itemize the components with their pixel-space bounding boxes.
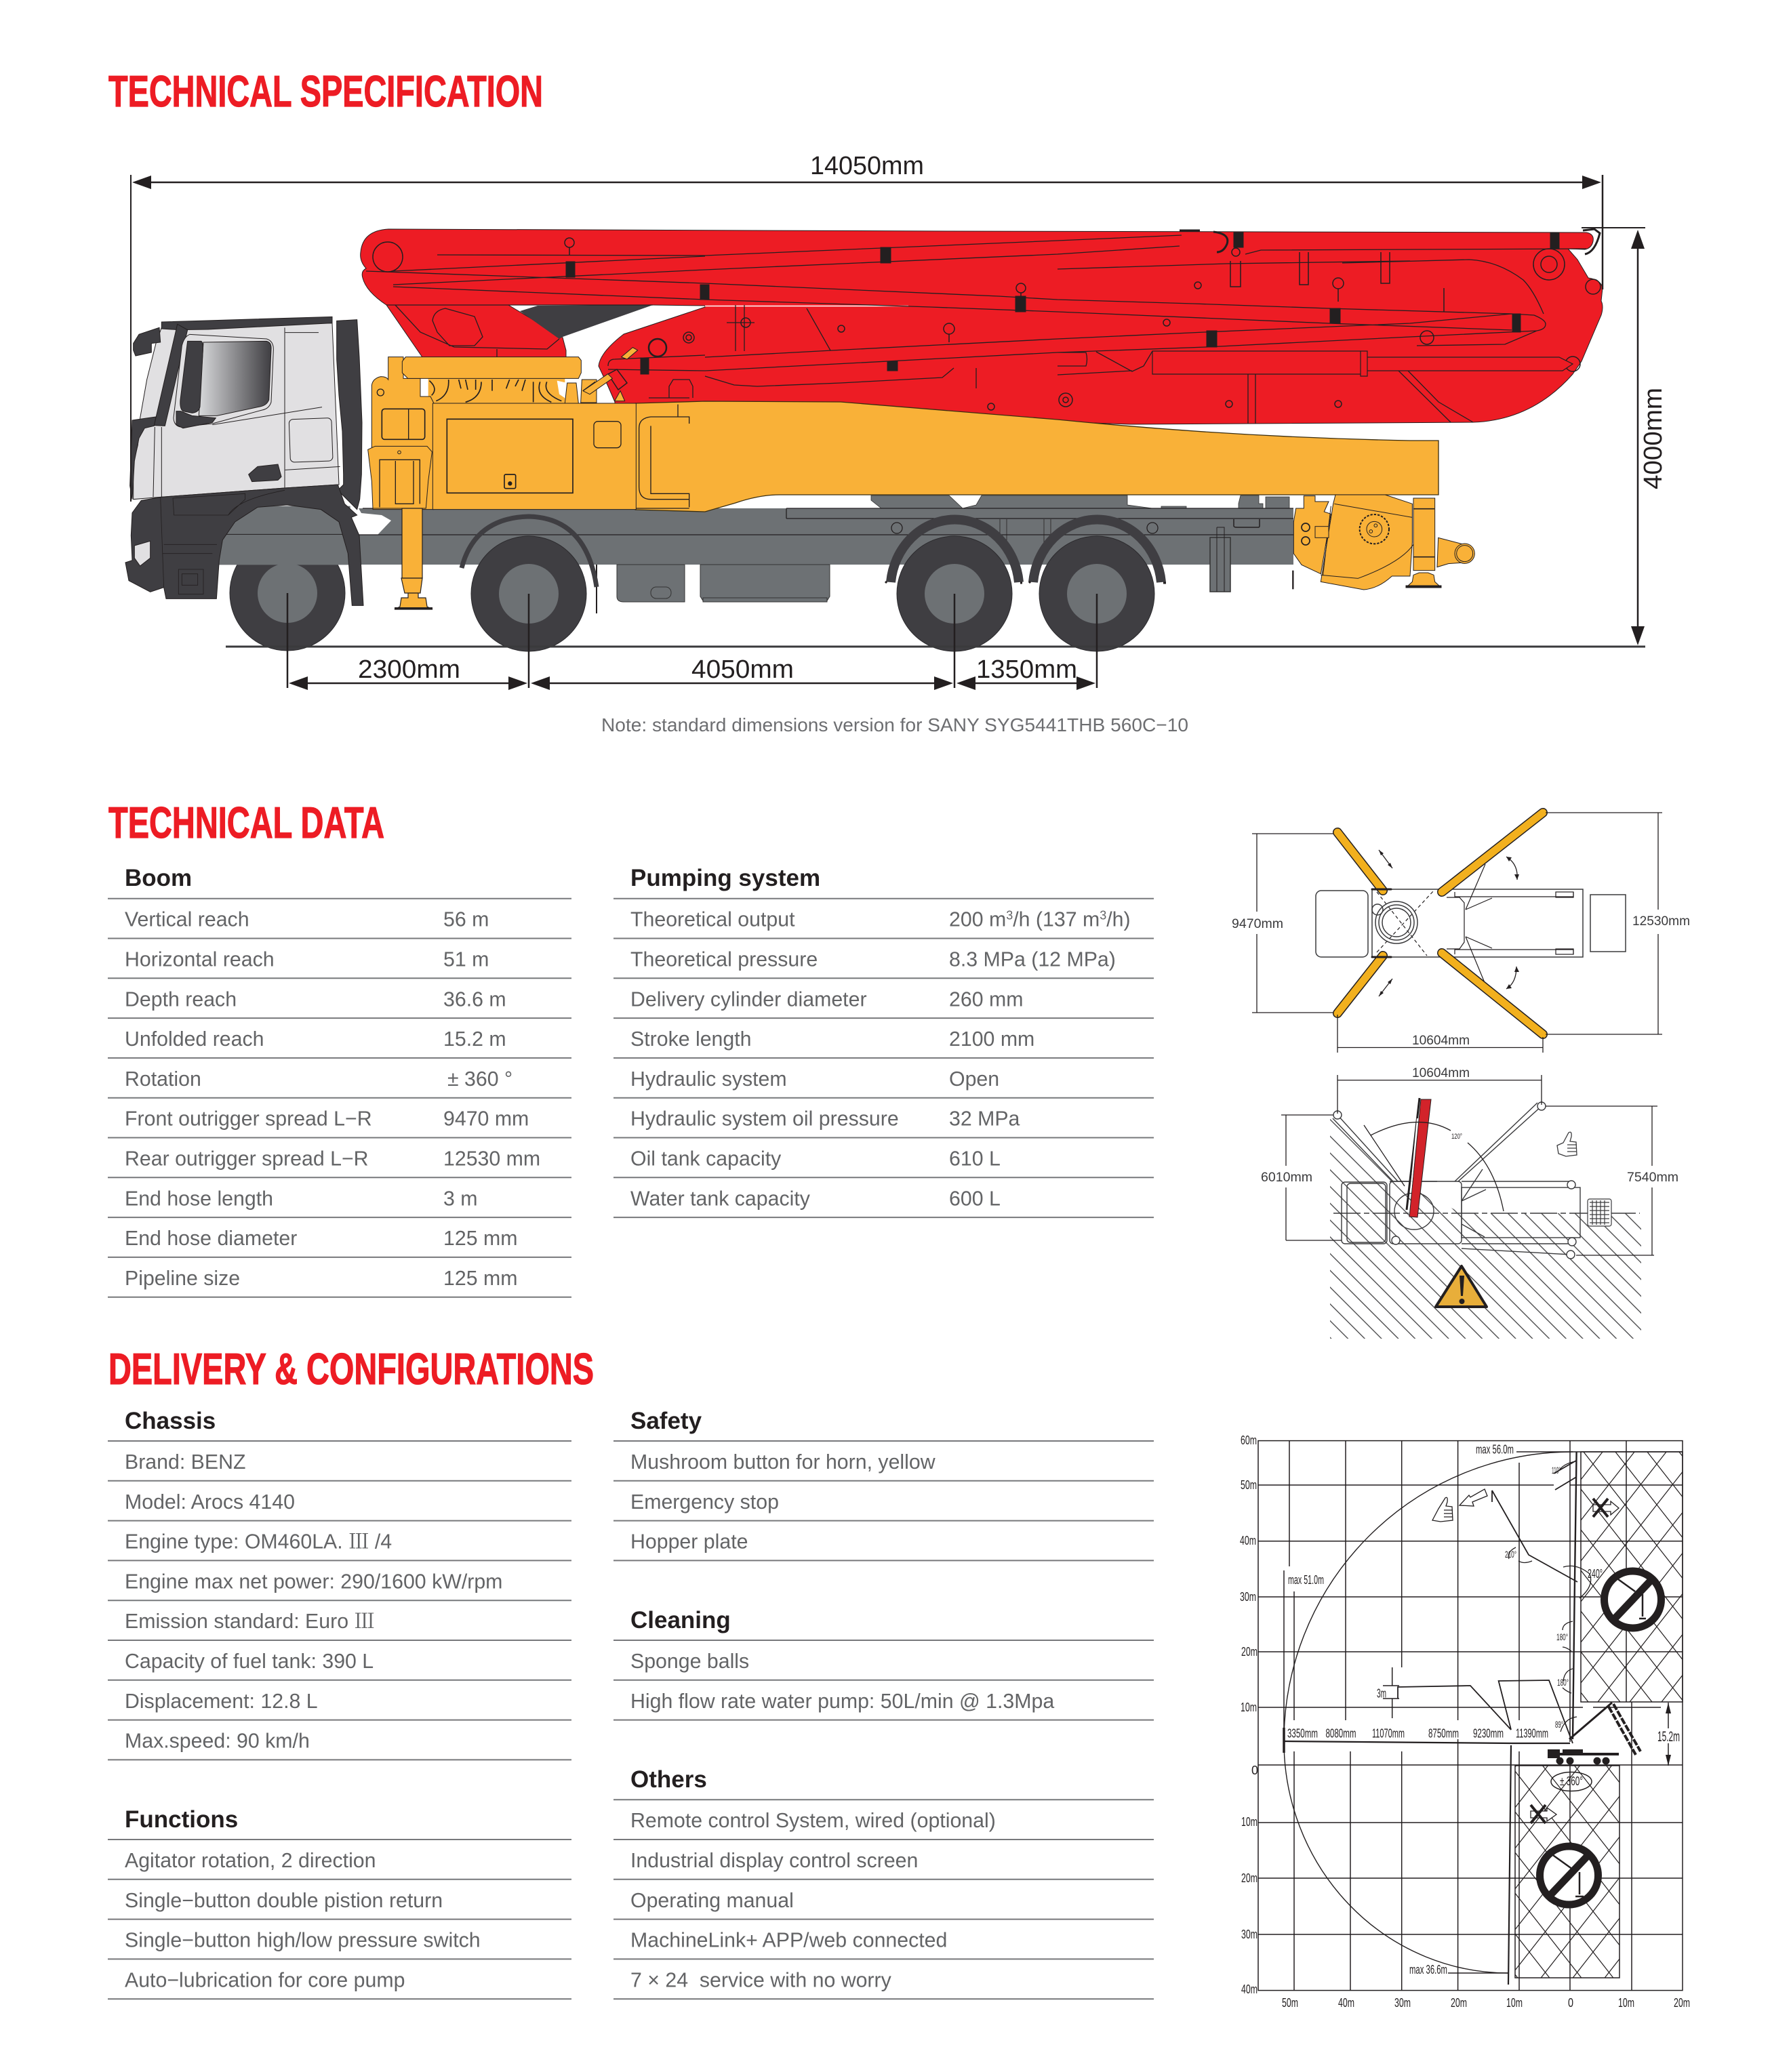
vertical axis labels: 50m	[1241, 1478, 1257, 1492]
plan: dimension 10604mm: 10604mm	[1412, 1034, 1470, 1048]
icon: thumb up	[1557, 1132, 1577, 1156]
agitator gear	[1360, 514, 1389, 544]
side window	[174, 334, 273, 427]
red concrete boom	[361, 229, 1603, 424]
crossed arrow upper	[1593, 1499, 1619, 1517]
table: pumping system	[613, 865, 1154, 1217]
list: chassis: Emission standard: Euro Ⅲ	[125, 1604, 375, 1634]
dimension: wheelbase values	[287, 593, 1097, 690]
rear pump and hopper	[1293, 495, 1474, 590]
dimension 10604mm: 10604mm	[1412, 1066, 1470, 1080]
thumb icon with direction arrow	[1432, 1489, 1487, 1522]
outrigger plan view diagram	[1232, 813, 1690, 1053]
chart grid	[1258, 1441, 1683, 1991]
list: others: Operating manual	[630, 1890, 794, 1912]
boom section lengths: 11390mm	[1516, 1727, 1548, 1741]
table: boom: 3 m	[443, 1187, 478, 1210]
plan: motion arrows	[1379, 850, 1519, 996]
table: pumping system: Theoretical pressure	[630, 949, 818, 971]
table: boom	[108, 865, 571, 1297]
list: chassis	[108, 1408, 571, 1760]
boom poses	[1284, 1452, 1641, 1985]
truck cab	[125, 317, 363, 605]
table: boom: ± 360 °	[447, 1068, 512, 1091]
plan: dimension 10604mm	[1337, 1015, 1543, 1053]
icon: hopper grid	[1588, 1199, 1611, 1226]
list: cleaning: Cleaning	[630, 1607, 731, 1633]
crossed arrow lower	[1531, 1805, 1556, 1823]
long yellow beam	[635, 401, 1438, 512]
vertical axis labels: 30m	[1241, 1928, 1257, 1941]
list: chassis: Max.speed: 90 km/h	[125, 1730, 310, 1753]
list: others: Industrial display control screen	[630, 1850, 918, 1872]
dimension: overall height 4000mm: 4000mm	[1639, 388, 1668, 489]
table: pumping system: 8.3 MPa (12 MPa)	[949, 949, 1116, 971]
angle arcs	[1508, 1461, 1591, 1732]
list: safety	[613, 1408, 1154, 1560]
vertical axis labels: 60m	[1241, 1434, 1257, 1447]
slew angle arc 120 degrees: 120°	[1451, 1133, 1462, 1141]
dimension: wheelbase values: 1350mm	[976, 655, 1077, 684]
table: boom: 36.6 m	[443, 988, 506, 1011]
no-entry sign lower	[1540, 1846, 1598, 1905]
truck side elevation drawing	[125, 229, 1645, 651]
vertical axis labels: 40m	[1240, 1534, 1256, 1547]
rod and cylinder	[1152, 351, 1573, 376]
table: boom: Front outrigger spread L−R	[125, 1108, 372, 1131]
second wheel	[471, 536, 586, 651]
horizontal axis labels	[1282, 1996, 1690, 2010]
joint angle labels: 180°	[1557, 1677, 1569, 1688]
vertical axis labels: 20m	[1241, 1645, 1257, 1659]
table: boom: 15.2 m	[443, 1028, 506, 1051]
chassis	[217, 495, 1293, 565]
wheel well gray	[217, 506, 350, 565]
dark rear strut	[520, 305, 653, 339]
table: pumping system: Oil tank capacity	[630, 1148, 782, 1170]
list: others: 7 × 24 service with no worry	[630, 1969, 892, 1991]
cab shell	[134, 323, 339, 500]
joint angle labels: 240°	[1588, 1567, 1603, 1581]
dimension 10604mm	[1337, 1066, 1542, 1114]
outlet pipe	[1437, 537, 1464, 567]
no-entry sign upper	[1604, 1571, 1661, 1628]
table: pumping system: 610 L	[949, 1148, 1001, 1170]
table: pumping system: Delivery cylinder diameter	[630, 988, 867, 1011]
table: boom: Vertical reach	[125, 909, 249, 931]
vertical axis labels: 30m	[1240, 1590, 1256, 1604]
door handle	[249, 464, 281, 482]
horizontal axis labels: 20m	[1674, 1996, 1690, 2010]
horizontal axis labels: 20m	[1451, 1996, 1467, 2010]
table: boom: End hose length	[125, 1187, 273, 1210]
hinge circles	[373, 238, 1601, 410]
table: pumping system: 200 m	[949, 909, 1006, 931]
table: boom: Unfolded reach	[125, 1028, 264, 1051]
dimension: wheelbase values: 2300mm	[358, 655, 460, 684]
joint angle labels: 110°	[1552, 1465, 1561, 1476]
vertical axis labels: 0	[1251, 1764, 1258, 1777]
table: pumping system: Theoretical output	[630, 909, 795, 931]
table: boom: Rear outrigger spread L−R	[125, 1148, 369, 1170]
reach envelope arc	[1284, 1452, 1573, 1973]
table: boom: Boom	[125, 865, 192, 891]
list: chassis: Chassis	[125, 1408, 216, 1434]
boom section lengths: 9230mm	[1473, 1727, 1504, 1741]
white gap between boom sections	[705, 305, 908, 306]
horizontal axis labels: 10m	[1506, 1996, 1523, 2010]
boom section lengths: 11070mm	[1372, 1727, 1405, 1741]
table: boom: 125 mm	[443, 1267, 517, 1290]
end bend and clamps	[1180, 229, 1600, 254]
top tube end and collars	[566, 232, 1559, 374]
door lines and panel	[153, 327, 340, 505]
table: pumping system: 260 mm	[949, 988, 1023, 1011]
table: pumping system: 2100 mm	[949, 1028, 1034, 1051]
rear wheel 1	[897, 536, 1012, 651]
end hose 3m dimension: 3m	[1377, 1686, 1386, 1700]
roof	[161, 317, 332, 330]
plan: dimension 12530mm	[1546, 813, 1690, 1034]
reach labels: max 56.0m	[1476, 1442, 1514, 1456]
list: chassis: Brand: BENZ	[125, 1451, 245, 1474]
horizontal axis labels: 50m	[1282, 1996, 1298, 2010]
front outrigger leg	[395, 508, 432, 609]
horizontal axis labels: 40m	[1338, 1996, 1354, 2010]
table: pumping system: 3	[1006, 909, 1013, 922]
list: functions: Single−button double pistion return	[125, 1890, 443, 1912]
rotation ellipse with label: ± 360°	[1560, 1774, 1583, 1788]
list: functions: Agitator rotation, 2 direction	[125, 1850, 376, 1872]
horizontal axis labels: 30m	[1394, 1996, 1411, 2010]
list: others: Remote control System, wired (optional)	[630, 1810, 996, 1832]
list: chassis: Model: Arocs 4140	[125, 1491, 295, 1514]
table: pumping system: Hydraulic system	[630, 1068, 787, 1091]
vertical axis labels: 10m	[1241, 1815, 1257, 1829]
list: functions: Functions	[125, 1806, 238, 1833]
rear pipe column	[337, 320, 362, 510]
list: safety: Hopper plate	[630, 1531, 748, 1553]
list: safety: Safety	[630, 1408, 702, 1434]
table: pumping system: Hydraulic system oil pressure	[630, 1108, 899, 1131]
plan: cab, body and rear outlines	[1316, 889, 1626, 957]
plan: internal frame lines	[1377, 864, 1573, 984]
table: boom: 125 mm	[443, 1227, 517, 1250]
A-pillar	[154, 324, 188, 426]
stability working zone diagram	[1261, 1066, 1678, 1339]
red boom	[1407, 1098, 1431, 1217]
horizontal axis labels: 10m	[1618, 1996, 1634, 2010]
list: chassis: Displacement: 12.8 L	[125, 1690, 318, 1713]
fog light	[134, 541, 150, 566]
outrigger arms	[1333, 1102, 1576, 1259]
table: pumping system: Pumping system	[630, 865, 820, 891]
list: others: Others	[630, 1766, 707, 1793]
boom section lengths: 8750mm	[1428, 1727, 1459, 1741]
heading: delivery and configurations: DELIVERY & CONFIGURATIONS	[108, 1344, 594, 1394]
note: Note: standard dimensions version for SANY SYG5441THB 560C−10	[601, 714, 1188, 735]
dimension 6010mm: 6010mm	[1261, 1171, 1312, 1185]
list: chassis: Capacity of fuel tank: 390 L	[125, 1650, 374, 1673]
end hose 3m dimension	[1377, 1667, 1399, 1718]
table: boom: Pipeline size	[125, 1267, 240, 1290]
icon: warning triangle	[1436, 1266, 1487, 1307]
dimension: wheelbase values: 4050mm	[691, 655, 794, 684]
table: boom: 56 m	[443, 909, 489, 931]
boom section lengths: 3350mm	[1287, 1727, 1318, 1741]
plan: slewing ring	[1372, 901, 1417, 943]
wheel fenders	[462, 516, 1166, 587]
table: boom: 12530 mm	[443, 1148, 540, 1170]
working range chart	[1240, 1434, 1690, 2010]
support column and foot	[1413, 498, 1435, 571]
truck outline top view	[1333, 1169, 1640, 1255]
unfolded reach dimension 15.2m: 15.2m	[1657, 1729, 1680, 1745]
lower cab and fender	[125, 485, 363, 605]
main box and front column (zoom coordinates)	[368, 348, 689, 510]
joint angle labels: 210°	[1505, 1549, 1516, 1560]
hopper body	[1321, 495, 1412, 590]
vertical axis labels	[1240, 1434, 1258, 1996]
frame bracket	[1293, 496, 1331, 574]
plan: dimension 9470mm: 9470mm	[1232, 917, 1283, 931]
lower cross-hatched no-go zone	[1515, 1766, 1619, 1978]
table: pumping system: Water tank capacity	[630, 1187, 811, 1210]
dimension 7540mm: 7540mm	[1627, 1171, 1678, 1185]
list: others: MachineLink+ APP/web connected	[630, 1930, 947, 1952]
table: boom: Rotation	[125, 1068, 201, 1091]
front wheel	[230, 535, 345, 651]
vertical axis labels: 20m	[1241, 1871, 1257, 1885]
table: boom: 51 m	[443, 949, 489, 971]
dimension: overall length 14050mm: 14050mm	[810, 152, 924, 180]
reach labels: max 36.6m	[1409, 1963, 1447, 1976]
table: pumping system: Stroke length	[630, 1028, 752, 1051]
table: boom: Depth reach	[125, 988, 237, 1011]
vertical axis labels: 40m	[1241, 1983, 1257, 1996]
tanks and hanging box	[597, 527, 1230, 613]
vertical axis labels: 10m	[1241, 1701, 1257, 1714]
dimension: overall height 4000mm	[1582, 228, 1668, 645]
list: cleaning: High flow rate water pump: 50L/min @ 1.3Mpa	[630, 1690, 1054, 1713]
mini truck on ground	[1548, 1749, 1619, 1765]
boom body	[361, 229, 1603, 424]
list: cleaning	[613, 1607, 1154, 1720]
grille strip	[130, 417, 156, 500]
door mirror	[180, 341, 203, 413]
table: pumping system: 600 L	[949, 1187, 1001, 1210]
heading: technical data: TECHNICAL DATA	[108, 798, 384, 847]
list: others	[613, 1766, 1154, 1999]
list: chassis: Engine max net power: 290/1600 kW/rpm	[125, 1570, 502, 1593]
pump connector	[1302, 523, 1310, 531]
reach labels	[1284, 1442, 1514, 1976]
yellow outrigger box and beam	[368, 348, 1438, 609]
upper cross-hatched no-go zone	[1516, 1452, 1683, 1702]
plan: dimension 12530mm: 12530mm	[1632, 914, 1690, 929]
list: functions: Auto−lubrication for core pump	[125, 1969, 405, 1991]
boom section lengths: 8080mm	[1326, 1727, 1356, 1741]
table: pumping system: Open	[949, 1068, 999, 1091]
list: safety: Mushroom button for horn, yellow	[630, 1451, 935, 1474]
table: boom: End hose diameter	[125, 1227, 297, 1250]
rear-view mirror	[134, 327, 161, 356]
boom tube outlines	[366, 235, 1586, 386]
title: technical specification: TECHNICAL SPECIFICATION	[108, 66, 543, 116]
table: boom: 9470 mm	[443, 1108, 529, 1131]
table: pumping system: 3	[1100, 909, 1106, 922]
list: functions	[108, 1806, 571, 1999]
boom section lengths	[1287, 1727, 1548, 1741]
ground line	[226, 645, 1645, 648]
joint angle labels: 89°	[1555, 1719, 1563, 1730]
rotation ellipse with label	[1551, 1772, 1592, 1791]
plan: dimension 9470mm	[1232, 834, 1333, 1013]
dimension 7540mm	[1546, 1106, 1678, 1255]
plan: four yellow outriggers	[1337, 813, 1543, 1034]
horizontal axis labels: 0	[1568, 1996, 1573, 2010]
pedestal and hinge details	[395, 305, 1473, 424]
joint angle labels	[1505, 1465, 1603, 1730]
table: pumping system: 32 MPa	[949, 1108, 1020, 1131]
reach labels: max 51.0m	[1288, 1573, 1324, 1587]
list: safety: Emergency stop	[630, 1491, 779, 1514]
list: chassis: Engine type: OM460LA. Ⅲ /4	[125, 1525, 392, 1555]
list: cleaning: Sponge balls	[630, 1650, 749, 1673]
unfolded reach dimension 15.2m	[1657, 1703, 1681, 1766]
hatched danger zone	[1330, 1119, 1641, 1339]
list: functions: Single−button high/low pressure switch	[125, 1930, 481, 1952]
table: pumping system: /h)	[1106, 909, 1131, 931]
joint angle labels: 180°	[1556, 1631, 1568, 1642]
slew angle arc 120 degrees	[1364, 1122, 1504, 1211]
dimension: overall length 14050mm	[131, 152, 1603, 502]
table: pumping system: /h (137 m	[1013, 909, 1100, 931]
rear wheel 2	[1039, 536, 1154, 651]
table: boom: Horizontal reach	[125, 949, 275, 971]
dimension 6010mm	[1261, 1115, 1342, 1240]
